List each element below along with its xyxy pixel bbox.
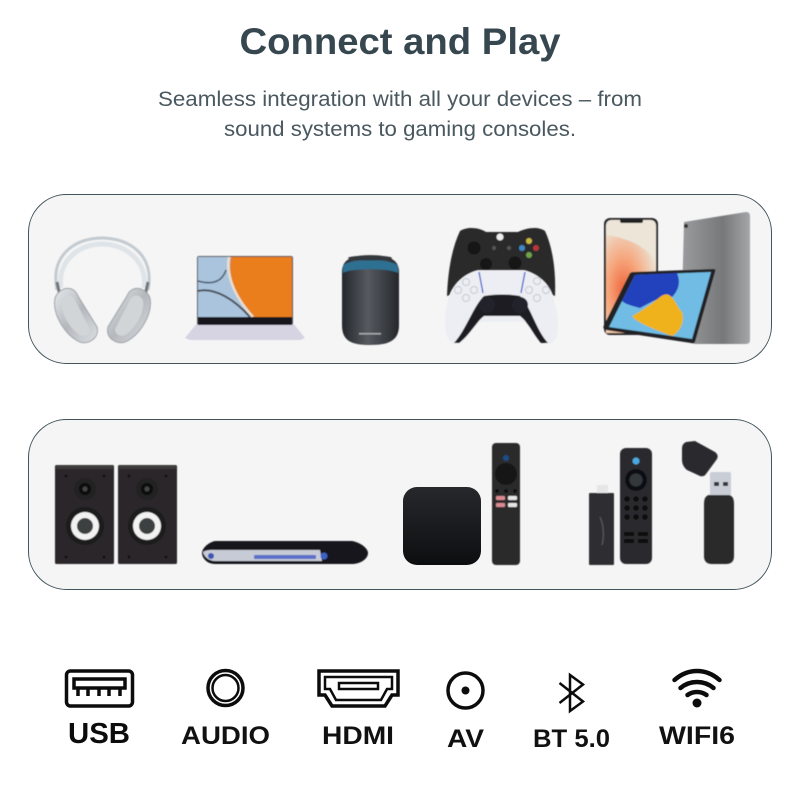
icon: smart speaker xyxy=(342,255,399,345)
icon: laptop xyxy=(185,256,305,340)
icon: PlayStation controller xyxy=(445,270,558,344)
icon: phone and tablets xyxy=(603,212,750,344)
icon: TV box remote xyxy=(492,443,520,565)
icon: audio jack xyxy=(208,670,243,706)
icon: streaming remote xyxy=(620,448,652,564)
icon: AV port xyxy=(448,673,483,708)
label: USB: USB xyxy=(68,718,130,750)
icon: right bookshelf speaker xyxy=(118,465,177,564)
label: WIFI6: WIFI6 xyxy=(659,722,735,750)
icon: USB drive xyxy=(682,441,734,564)
icon: Xbox controller xyxy=(447,228,555,296)
label: AV: AV xyxy=(447,725,484,753)
subtitle xyxy=(158,88,642,141)
icon: DVD player xyxy=(202,541,368,564)
label: AUDIO: AUDIO xyxy=(181,722,270,750)
icon: streaming stick xyxy=(589,485,614,565)
icon: USB port xyxy=(66,671,132,706)
subtitle: Seamless integration with all your devices – from xyxy=(158,88,642,111)
icon: Bluetooth xyxy=(560,675,583,711)
icon: headphones xyxy=(55,238,150,343)
panel: wireless and personal devices xyxy=(28,194,772,364)
icon: left bookshelf speaker xyxy=(55,465,114,564)
title: Connect and Play xyxy=(240,21,561,62)
subtitle: sound systems to gaming consoles. xyxy=(224,118,576,141)
icon: WiFi xyxy=(674,671,720,708)
panel: home entertainment devices xyxy=(28,420,772,590)
icon: TV box xyxy=(403,487,481,565)
icon: HDMI port xyxy=(319,671,398,706)
label: BT 5.0: BT 5.0 xyxy=(533,725,610,753)
label: HDMI: HDMI xyxy=(322,722,394,750)
